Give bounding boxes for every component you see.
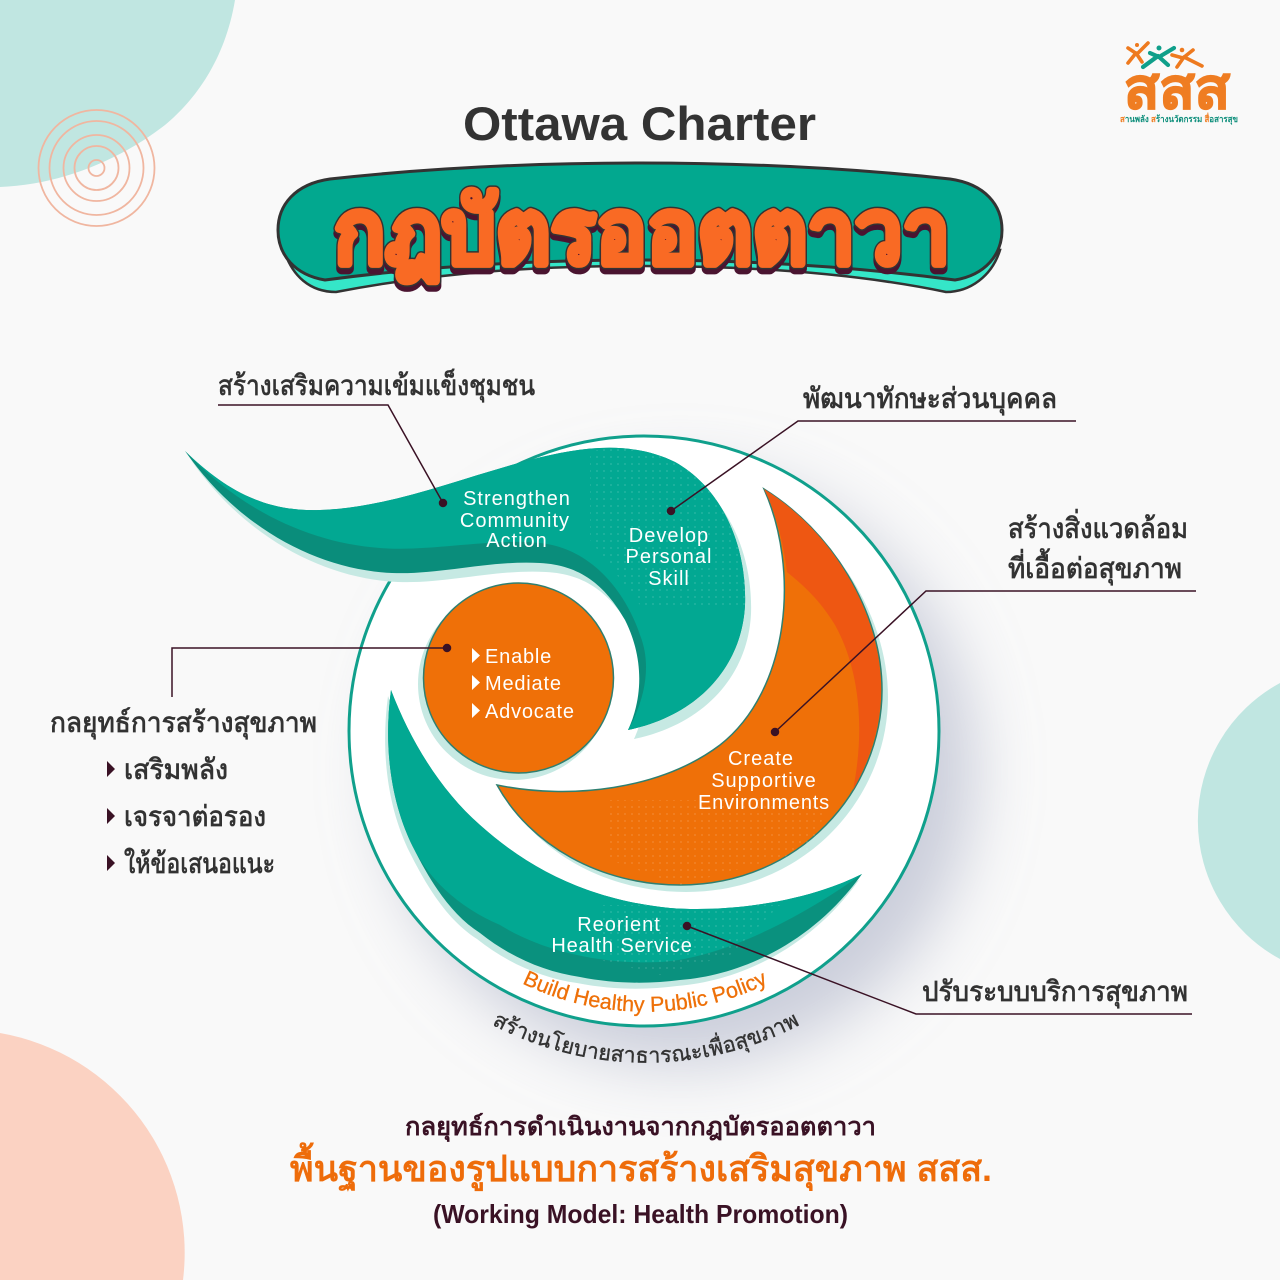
label: Develop Personal Skill: Personal [626, 546, 712, 568]
callout: strategies: เจรจาต่อรอง [124, 801, 266, 832]
callout: health service: ปรับระบบบริการสุขภาพ [922, 976, 1188, 1009]
banner heading outline: กฎบัตรออตตาวา [334, 183, 950, 283]
petal dark underside [185, 448, 745, 730]
petal shadow [503, 496, 888, 892]
callout: personal skill: พัฒนาทักษะส่วนบุคคล [803, 383, 1057, 416]
callout: strategies: เสริมพลัง [124, 754, 228, 785]
list: Enable Mediate Advocate [472, 646, 575, 723]
background circle: bottom left [0, 1033, 185, 1280]
label: Develop Personal Skill [626, 525, 712, 590]
label: Create Supportive Environments: Create [728, 748, 794, 770]
petal dark underside [388, 690, 862, 983]
center circle shadow [418, 588, 610, 780]
callout: community: สร้างเสริมความเข้มแข็งชุมชน [218, 368, 535, 403]
footer heading: กลยุทธ์การดำเนินงานจากกฎบัตรออตตาวา [405, 1112, 876, 1143]
callout: strategies: กลยุทธ์การสร้างสุขภาพ [50, 707, 317, 740]
title: Ottawa Charter: Ottawa Charter [463, 97, 816, 150]
petal: Strengthen Community Action and Develop Personal Skill [185, 448, 751, 739]
icon: orange figure right [1172, 48, 1202, 67]
leader line: personal skill [668, 421, 1076, 514]
label: Strengthen Community Action: Community [460, 510, 570, 532]
label: Create Supportive Environments: Environments [698, 792, 830, 814]
list: Enable Mediate Advocate: Mediate [485, 673, 562, 695]
title banner [278, 163, 1002, 292]
background circle: right [1198, 683, 1280, 959]
label: Strengthen Community Action [460, 488, 571, 552]
callout: environments [1008, 509, 1188, 586]
footer subtitle: (Working Model: Health Promotion) [433, 1199, 848, 1229]
footer title: พื้นฐานของรูปแบบการสร้างเสริมสุขภาพ สสส. [290, 1142, 992, 1192]
center circle: strategies [418, 583, 614, 780]
leader line: community [218, 405, 446, 506]
label: Reorient Health Service: Reorient [577, 914, 661, 936]
banner underside [284, 250, 1000, 292]
leader line: health service [684, 922, 1192, 1014]
banner heading: กฎบัตรออตตาวา [334, 183, 950, 283]
label: Create Supportive Environments: Supportive [711, 770, 817, 792]
callout: strategies [50, 707, 317, 879]
petal highlight strip [764, 489, 881, 790]
callout: environments: ที่เอื้อต่อสุขภาพ [1008, 548, 1182, 586]
petal body [388, 690, 862, 962]
list: Enable Mediate Advocate: Advocate [485, 701, 575, 723]
petal dot texture [590, 448, 745, 605]
curved label: Thai policy caption: สร้างนโยบายสาธารณะเพื่อสุขภาพ [494, 1014, 799, 1063]
soft shadow under the diagram [385, 475, 975, 1065]
banner body [278, 163, 1002, 280]
logo: สสส [1120, 43, 1238, 125]
callout: strategies: ให้ข้อเสนอแนะ [124, 847, 275, 879]
petal body [497, 489, 882, 885]
icon: orange figure left [1128, 43, 1148, 63]
leader line: environments [772, 591, 1196, 736]
leader line: strategies [172, 644, 450, 697]
logo tagline: สานพลัง สร้างนวัตกรรม สื่อสารสุข [1120, 112, 1238, 125]
petal shadow [385, 696, 859, 989]
petal: Create Supportive Environments [497, 489, 888, 892]
logo wordmark: สสส [1124, 57, 1231, 120]
label: Develop Personal Skill: Skill [648, 568, 690, 590]
banner heading shadow: กฎบัตรออตตาวา [334, 188, 950, 288]
label: Strengthen Community Action: Action [486, 530, 548, 552]
label: Reorient Health Service: Health Service [551, 935, 693, 957]
icon: teal figure [1143, 46, 1174, 67]
label: Strengthen Community Action: Strengthen [463, 488, 571, 510]
list: Enable Mediate Advocate: Enable [485, 646, 552, 668]
petal shadow [191, 457, 751, 739]
petal dot texture [610, 800, 830, 885]
petal dot texture [600, 905, 780, 975]
label: Reorient Health Service [551, 914, 693, 957]
petal body [185, 448, 745, 730]
label: Develop Personal Skill: Develop [629, 525, 709, 547]
callout: environments: สร้างสิ่งแวดล้อม [1008, 509, 1188, 544]
petal: Reorient Health Service [385, 690, 862, 989]
label: Create Supportive Environments [698, 748, 830, 814]
background circle: top left [0, 0, 235, 187]
center circle body [424, 583, 614, 773]
diagram: outer circle, Build Healthy Public Policy [349, 436, 939, 1026]
curved label: Build Healthy Public Policy: Build Healthy Public Policy [523, 970, 764, 1016]
icon: concentric rings [38, 110, 154, 226]
